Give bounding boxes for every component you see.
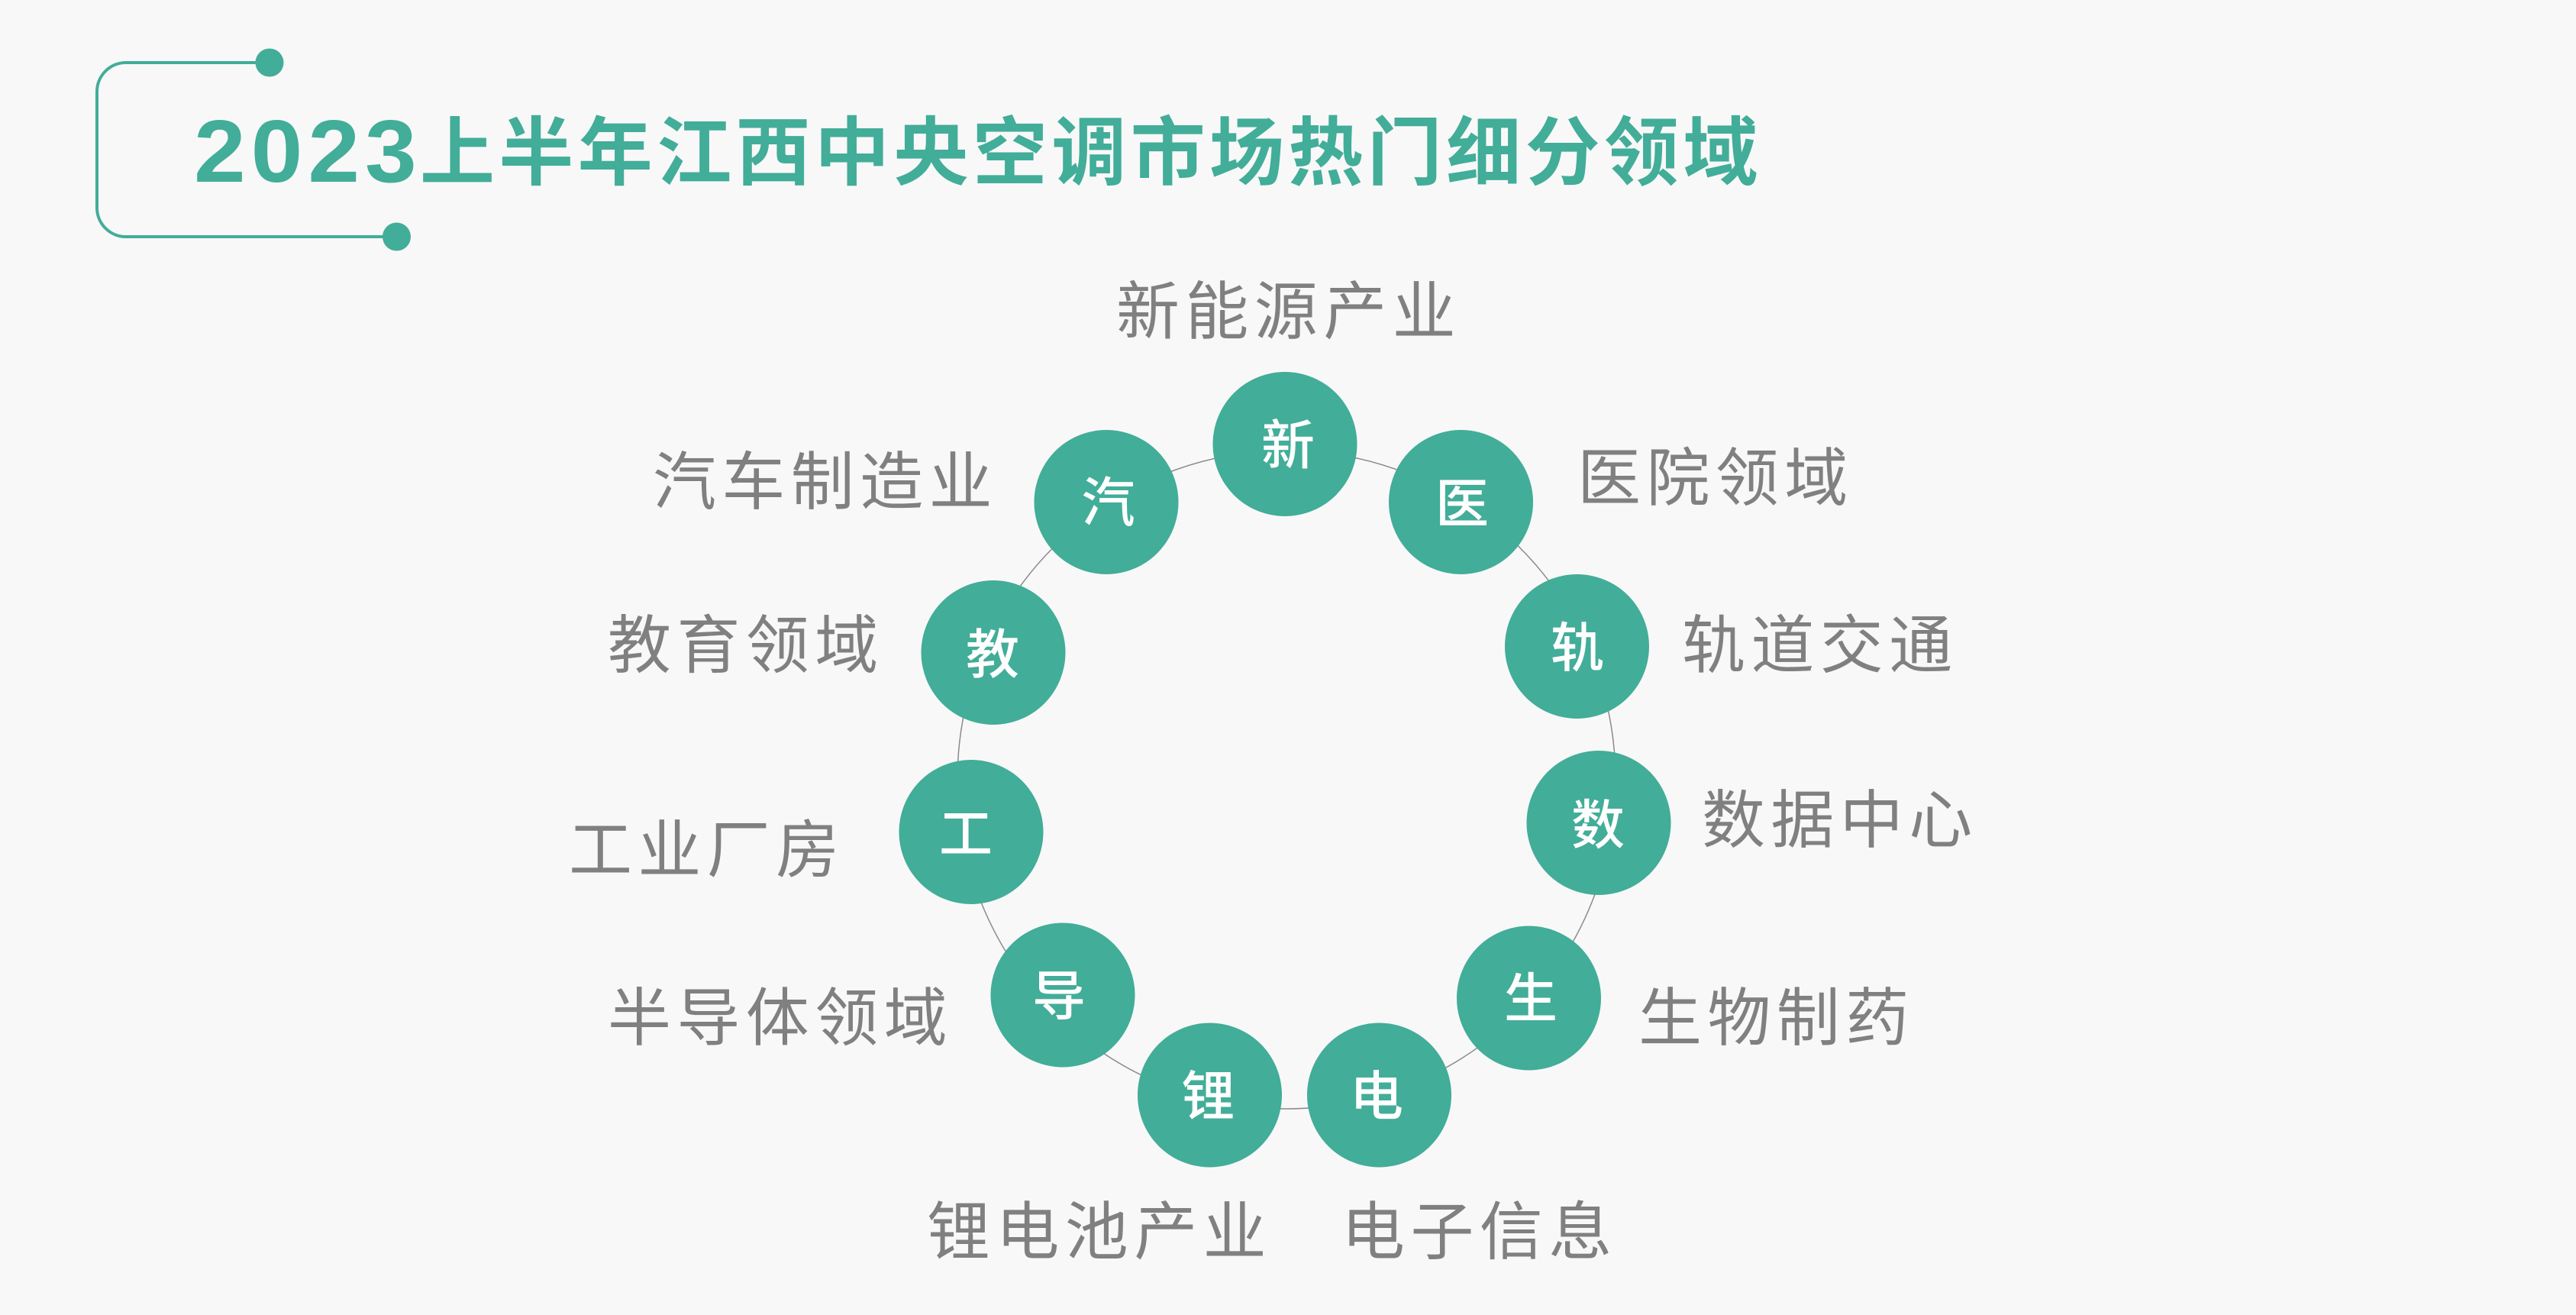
node: 汽: 汽 [1081, 473, 1135, 533]
title: 上半年江西中央空调市场热门细分领域 [420, 111, 1762, 195]
node: 新: 新 [1261, 415, 1315, 475]
node: 医: 医 [1435, 474, 1489, 534]
title: 2023 [194, 102, 422, 201]
node: 教 [921, 580, 1066, 725]
label: 数据中心: 数据中心 [1702, 785, 1978, 856]
label: 汽车制造业: 汽车制造业 [653, 447, 998, 518]
node: 导 [991, 922, 1135, 1068]
label: 新能源产业: 新能源产业 [1116, 276, 1461, 347]
node: 电 [1307, 1023, 1451, 1167]
title bracket decoration [97, 49, 411, 250]
label: 电子信息: 电子信息 [1341, 1197, 1618, 1268]
node: 锂: 锂 [1182, 1067, 1235, 1126]
label: 教育领域: 教育领域 [608, 610, 884, 681]
node: 轨 [1505, 574, 1649, 719]
label: 轨道交通: 轨道交通 [1682, 610, 1958, 681]
connecting ring [957, 451, 1616, 1109]
node: 教: 教 [966, 625, 1019, 684]
label: 生物制药: 生物制药 [1638, 983, 1915, 1054]
node: 电: 电 [1350, 1067, 1403, 1126]
node: 数 [1527, 751, 1671, 895]
node: 工 [899, 760, 1043, 904]
node: 锂 [1138, 1023, 1282, 1167]
node: 生: 生 [1504, 969, 1558, 1029]
node: 医 [1389, 430, 1533, 574]
node: 导: 导 [1032, 967, 1086, 1026]
label: 锂电池产业: 锂电池产业 [927, 1197, 1272, 1268]
node: 汽 [1034, 430, 1179, 574]
node: 数: 数 [1571, 796, 1625, 855]
label: 半导体领域: 半导体领域 [608, 983, 953, 1054]
label: 医院领域: 医院领域 [1577, 443, 1854, 514]
node: 轨: 轨 [1551, 619, 1604, 678]
node: 新 [1212, 372, 1357, 516]
label: 工业厂房: 工业厂房 [569, 815, 845, 886]
node: 生 [1457, 926, 1601, 1071]
node: 工: 工 [939, 805, 993, 864]
